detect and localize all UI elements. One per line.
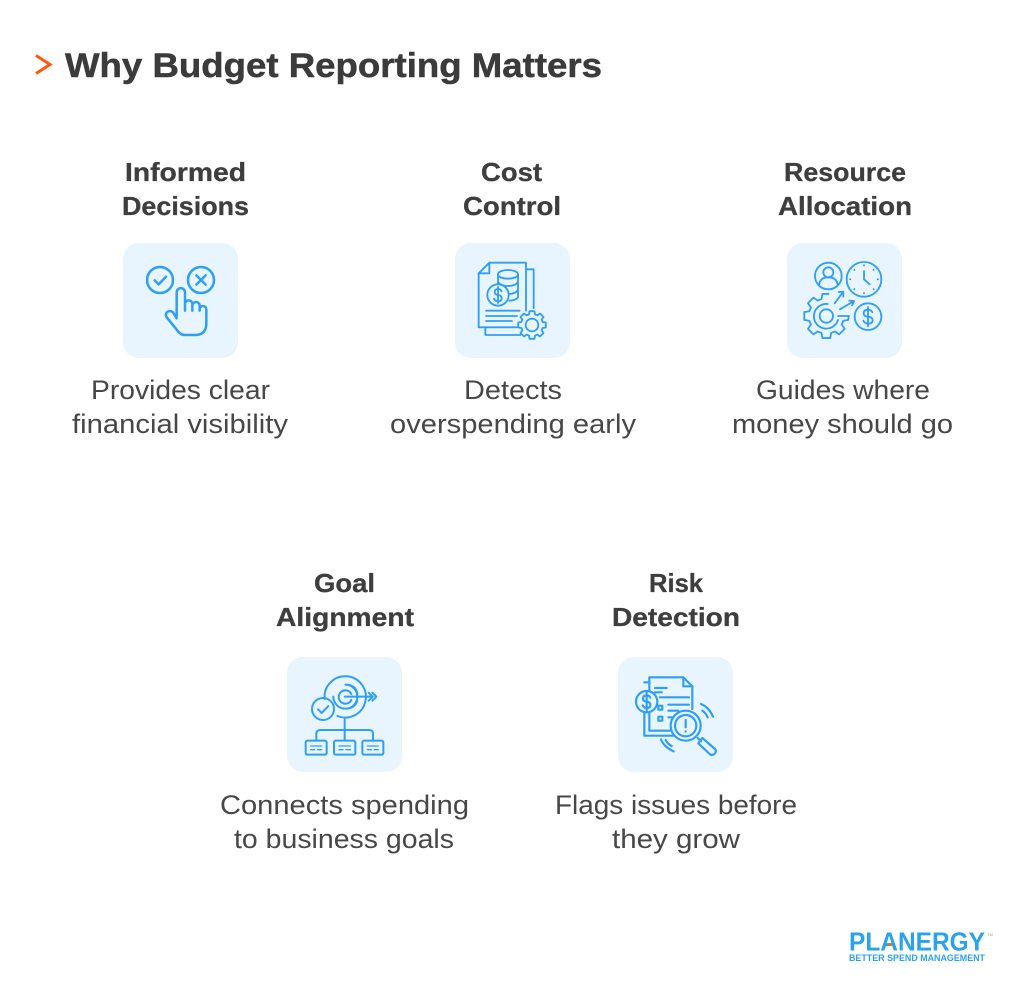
panel: informed decisions	[72, 157, 289, 439]
panel: resource allocation	[732, 157, 953, 439]
heading	[463, 157, 561, 221]
heading: Goal	[314, 568, 375, 598]
description	[72, 375, 289, 439]
description: to business goals	[234, 824, 454, 854]
icon: gear, person, clock and dollar	[787, 243, 902, 358]
description	[390, 375, 637, 439]
description	[220, 790, 469, 854]
icon: hand choosing check or cross	[123, 243, 238, 358]
heading: Risk	[649, 568, 704, 598]
description: financial visibility	[72, 409, 289, 439]
description	[732, 375, 953, 439]
heading	[122, 157, 249, 221]
icon: document with coins and gear	[455, 243, 570, 358]
logo: Planergy: BETTER SPEND MANAGEMENT	[849, 953, 985, 963]
description: Provides clear	[91, 375, 270, 405]
description: money should go	[732, 409, 953, 439]
icon: target and hierarchy	[287, 657, 402, 772]
heading: Decisions	[122, 191, 249, 221]
heading	[778, 157, 912, 221]
panel: goal alignment	[220, 568, 469, 854]
heading	[612, 568, 740, 632]
title text: Why Budget Reporting Matters	[65, 47, 602, 85]
description: Flags issues before	[555, 790, 797, 820]
heading: Detection	[612, 602, 740, 632]
logo: Planergy: PLANERGY	[849, 926, 985, 956]
icon: document under magnifier	[618, 657, 733, 772]
panel: cost control	[390, 157, 637, 439]
heading: Informed	[125, 157, 246, 187]
title	[36, 47, 602, 85]
description: they grow	[612, 824, 741, 854]
heading	[276, 568, 414, 632]
heading: Alignment	[276, 602, 414, 632]
description: overspending early	[390, 409, 637, 439]
heading: Allocation	[778, 191, 912, 221]
description: Guides where	[756, 375, 930, 405]
heading: Resource	[784, 157, 906, 187]
description: Connects spending	[220, 790, 469, 820]
description: Detects	[464, 375, 562, 405]
heading: Control	[463, 191, 561, 221]
icon: orange chevron	[36, 56, 50, 74]
heading: Cost	[481, 157, 542, 187]
description	[555, 790, 797, 854]
logo: Planergy: TM	[987, 932, 993, 937]
panel: risk detection	[555, 568, 797, 854]
